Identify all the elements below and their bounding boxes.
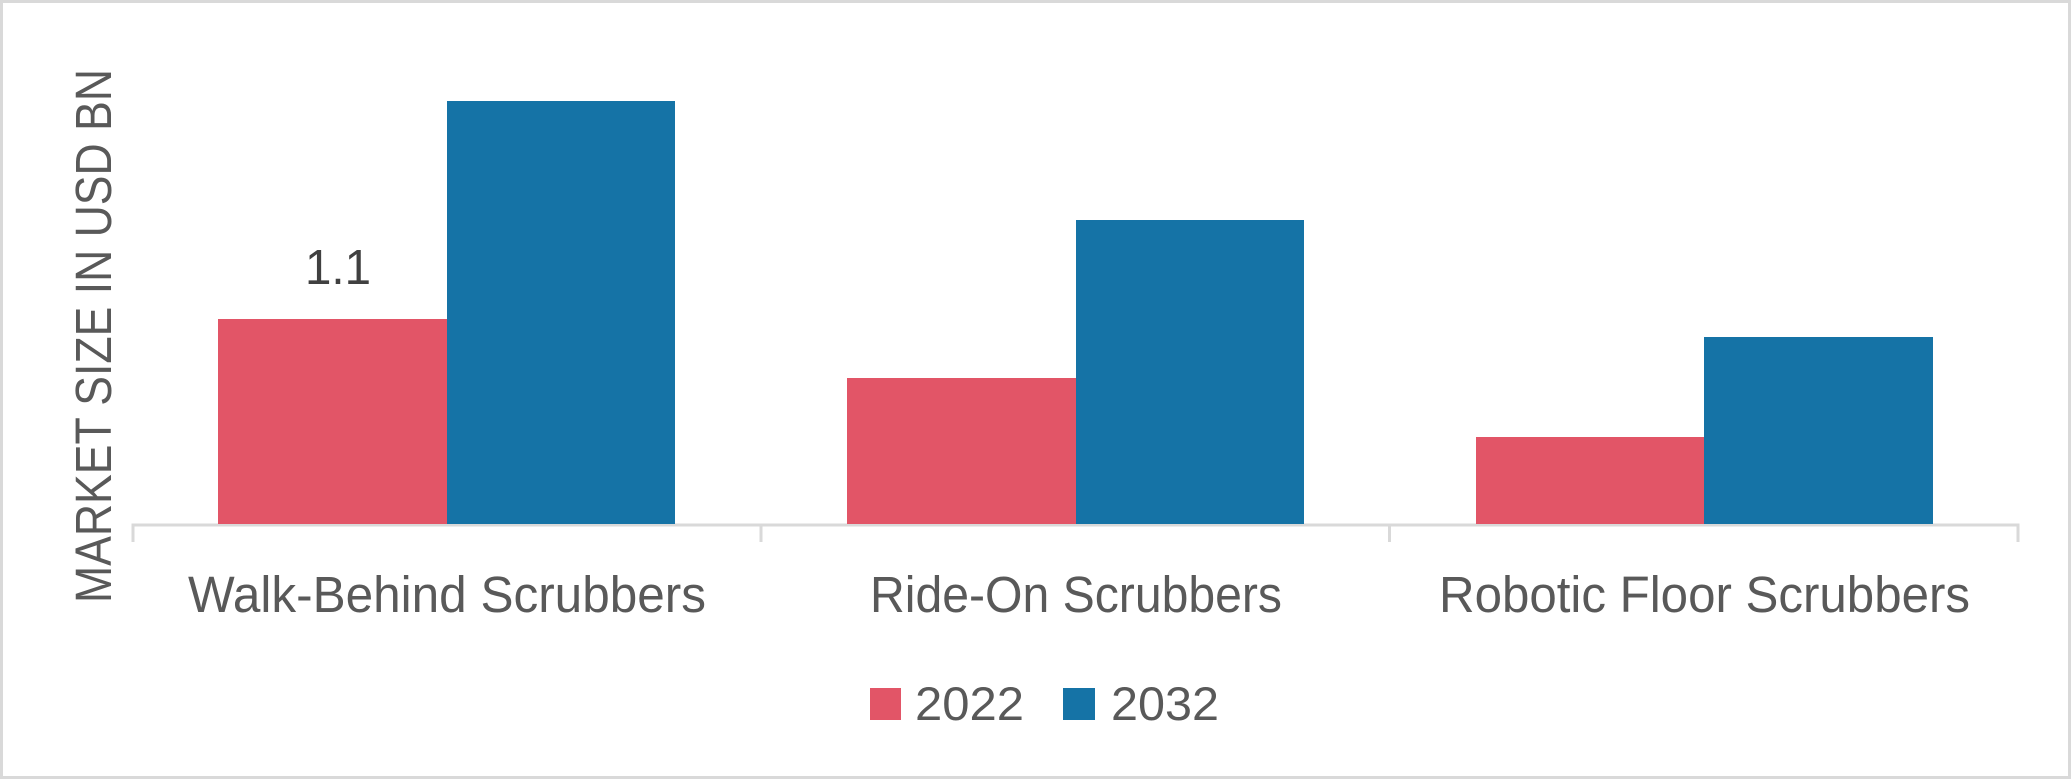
y-axis title: MARKET SIZE IN USD BN bbox=[65, 69, 122, 603]
bar: Walk-Behind 2022 bbox=[218, 319, 447, 524]
legend swatch: 2032 bbox=[1063, 688, 1095, 720]
category label: Walk-Behind Scrubbers: Walk-Behind Scrubbers bbox=[188, 566, 706, 623]
bar: Walk-Behind 2032 bbox=[447, 101, 675, 524]
category label: Robotic Floor Scrubbers: Robotic Floor Scrubbers bbox=[1439, 566, 1970, 623]
bar chart bbox=[133, 101, 2018, 542]
group: Walk-Behind Scrubbers bars bbox=[218, 101, 675, 524]
data label: 1.1: 1.1 bbox=[305, 241, 371, 295]
bar: Ride-On 2022 bbox=[847, 378, 1076, 524]
bar: Ride-On 2032 bbox=[1076, 220, 1304, 524]
legend label: 2022: 2022 bbox=[915, 677, 1024, 730]
category label: Ride-On Scrubbers: Ride-On Scrubbers bbox=[870, 566, 1282, 623]
legend label: 2032: 2032 bbox=[1111, 677, 1219, 730]
group: Ride-On Scrubbers bars bbox=[847, 220, 1304, 524]
legend swatch: 2022 bbox=[870, 688, 901, 720]
legend bbox=[870, 677, 1219, 730]
group: Robotic Floor Scrubbers bars bbox=[1476, 337, 1933, 524]
bar: Robotic 2022 bbox=[1476, 437, 1704, 524]
x-axis line with ticks bbox=[133, 525, 2018, 542]
bar: Robotic 2032 bbox=[1704, 337, 1933, 524]
